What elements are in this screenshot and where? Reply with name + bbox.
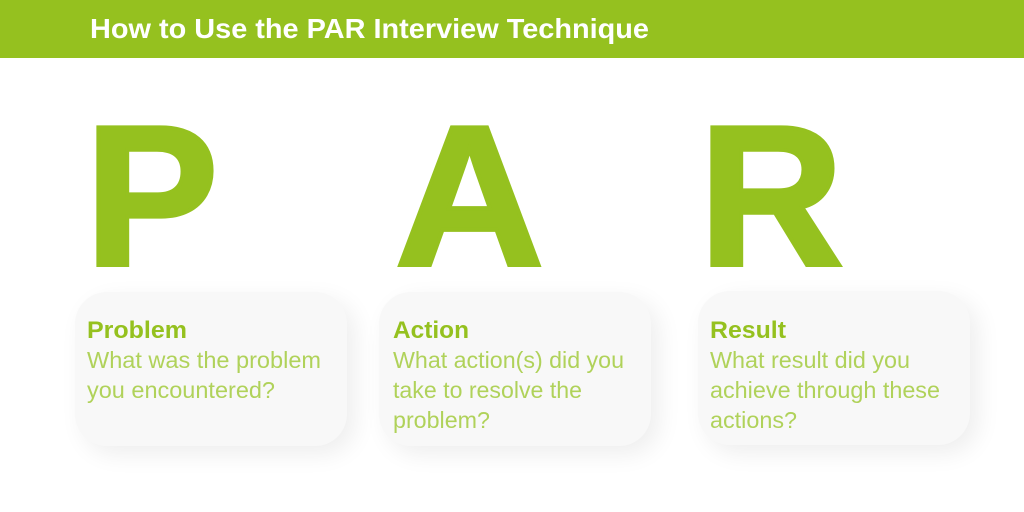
letter R: R xyxy=(699,85,843,308)
problem heading: Problem xyxy=(87,317,187,344)
result text xyxy=(710,317,940,433)
panel: problem card background xyxy=(75,292,347,446)
letter P: P xyxy=(85,85,218,308)
action body: take to resolve the xyxy=(393,377,582,403)
problem body: What was the problem xyxy=(87,347,321,373)
problem body xyxy=(87,347,321,403)
result body: actions? xyxy=(710,407,797,433)
result body: What result did you xyxy=(710,347,910,373)
result body xyxy=(710,347,940,433)
panel: action card background xyxy=(379,292,651,446)
problem text xyxy=(87,317,321,403)
panel: result card background xyxy=(698,291,970,445)
action body: problem? xyxy=(393,407,490,433)
header band xyxy=(0,0,1024,58)
action text xyxy=(393,317,624,433)
action body: What action(s) did you xyxy=(393,347,624,373)
letter A: A xyxy=(395,85,544,308)
result heading: Result xyxy=(710,317,786,344)
problem body: you encountered? xyxy=(87,377,275,403)
result body: achieve through these xyxy=(710,377,940,403)
action heading: Action xyxy=(393,317,469,344)
action body xyxy=(393,347,624,433)
title: How to Use the PAR Interview Technique xyxy=(90,13,649,44)
